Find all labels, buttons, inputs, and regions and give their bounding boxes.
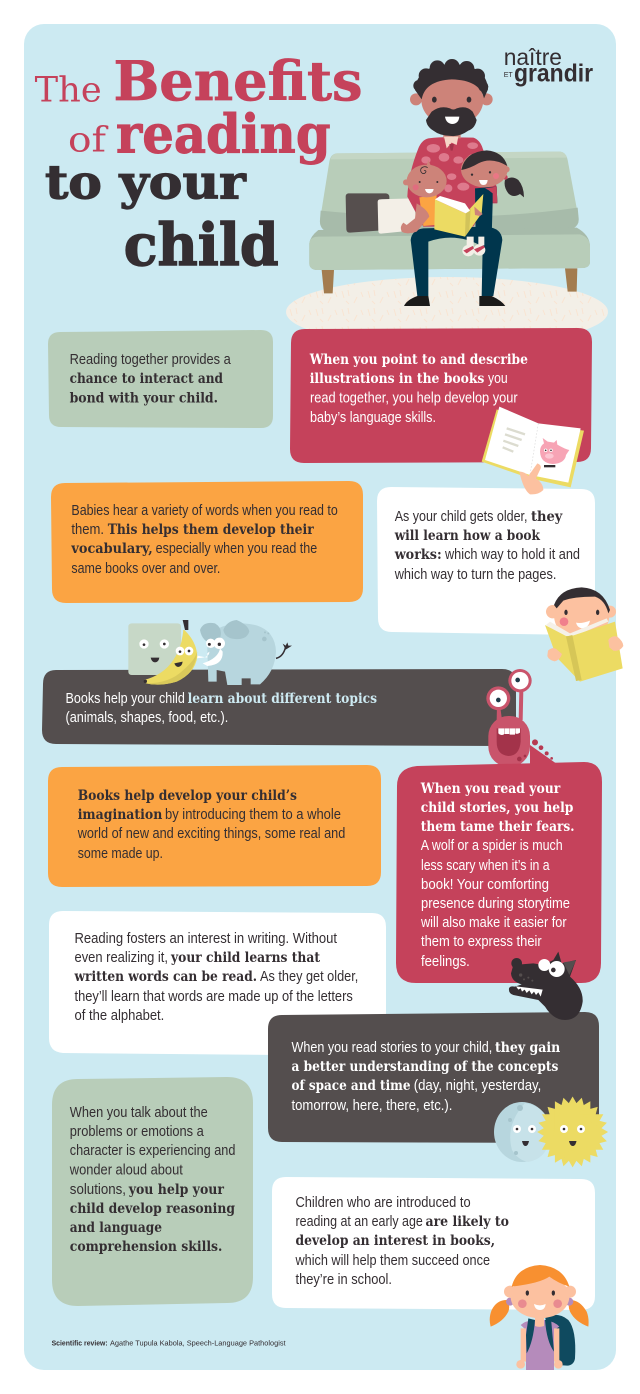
card: imagination: some made up.: [78, 846, 163, 862]
card: interest in writing: even realizing it,: [74, 950, 168, 966]
card: reasoning and comprehension: solutions,: [70, 1182, 126, 1198]
card: reasoning and comprehension: [52, 1077, 253, 1306]
card: bonding: [48, 330, 273, 428]
card: illustrations: illustrations in the books: [310, 371, 485, 387]
card: vocabulary: especially when you read the: [156, 541, 317, 557]
card: reasoning and comprehension: comprehension skills.: [70, 1239, 222, 1255]
card: interest in writing: written words can be read.: [74, 969, 257, 985]
icon: square, banana and elephant characters: [128, 620, 292, 685]
card: reasoning and comprehension: you help your: [128, 1182, 225, 1198]
icon: girl with backpack: [490, 1265, 589, 1370]
title: [35, 49, 362, 279]
title: Benefits: [114, 49, 362, 113]
card: tame fears: will also make it easier for: [420, 915, 567, 931]
card: imagination: world of new and exciting things, some real and: [77, 826, 345, 842]
card: how a book works: which way to turn the pages.: [394, 567, 556, 583]
card: interest in writing: [49, 911, 386, 1056]
card: different topics: [42, 669, 516, 746]
card: tame fears: [396, 762, 602, 983]
card: interest in books: which will help them succeed once: [295, 1253, 490, 1269]
card: reasoning and comprehension: When you talk about the: [70, 1105, 208, 1121]
card: tame fears: them tame their fears.: [421, 819, 574, 835]
card: interest in writing: they’ll learn that words are made up of the letters: [74, 989, 353, 1005]
card: bonding: chance to interact and: [70, 371, 223, 387]
icon: smiling square: [128, 623, 181, 675]
card: imagination: imagination: [78, 807, 162, 823]
card: how a book works: they: [531, 509, 563, 525]
rug: [286, 277, 608, 347]
card: vocabulary: same books over and over.: [71, 561, 220, 577]
card: vocabulary: vocabulary,: [70, 541, 153, 557]
sofa: [309, 152, 590, 293]
open book: [434, 194, 483, 237]
card: space and time: of space and time: [292, 1078, 411, 1094]
card: how a book works: As your child gets older,: [395, 509, 528, 525]
card: illustrations: you: [488, 371, 508, 387]
card: tame fears: presence during storytime: [421, 896, 570, 912]
card: how a book works: works:: [394, 547, 442, 563]
card: interest in books: they’re in school.: [296, 1272, 392, 1288]
card: tame fears: child stories, you help: [421, 800, 573, 816]
icon: wolf: [509, 952, 583, 1020]
card: imagination: by introducing them to a whole: [165, 807, 341, 823]
girl: [461, 150, 524, 256]
illustration: father reading on sofa: [286, 59, 608, 347]
card: illustrations: [290, 328, 592, 463]
card: different topics: (animals, shapes, food, etc.).: [66, 710, 228, 726]
icon: red monster: [486, 669, 558, 767]
card: interest in books: [272, 1177, 595, 1310]
card: space and time: (day, night, yesterday,: [414, 1078, 541, 1094]
card: reasoning and comprehension: and language: [70, 1220, 162, 1236]
scientific review credit: Agathe Tupula Kabola, Speech-Language Pathologist: [110, 1338, 286, 1348]
card: tame fears: them to express their: [421, 934, 542, 950]
card: interest in writing: your child learns that: [170, 950, 321, 966]
icon: boy reading a book: [545, 587, 623, 682]
scientific review credit: Scientific review:: [52, 1338, 108, 1348]
card: imagination: [48, 765, 381, 887]
elephant: [194, 620, 292, 685]
card: interest in books: reading at an early age: [296, 1214, 423, 1230]
card: space and time: tomorrow, here, there, etc.).: [292, 1098, 452, 1114]
card: vocabulary: them.: [71, 522, 104, 538]
card: tame fears: book! Your comforting: [421, 877, 549, 893]
card: how a book works: [377, 487, 595, 635]
title: to your: [45, 155, 247, 210]
card: interest in books: develop an interest in books,: [296, 1233, 495, 1249]
card: interest in writing: of the alphabet.: [74, 1008, 164, 1024]
card: interest in books: Children who are introduced to: [296, 1195, 471, 1211]
card: interest in writing: As they get older,: [260, 969, 358, 985]
icon: open book with pig and pointing hand: [482, 407, 584, 494]
card: vocabulary: Babies hear a variety of words when you read to: [71, 503, 338, 519]
baby: [401, 160, 447, 233]
card: bonding: bond with your child.: [70, 390, 218, 406]
logo: naitre et grandir: ET: [504, 70, 513, 79]
logo: naitre et grandir: grandir: [514, 60, 593, 88]
father, children and sofa artwork: [309, 59, 590, 306]
card: space and time: a better understanding of the concepts: [292, 1059, 559, 1075]
card: reasoning and comprehension: character is experiencing and: [70, 1143, 235, 1159]
card: how a book works: which way to hold it and: [444, 547, 580, 563]
card: different topics: learn about different topics: [188, 691, 377, 707]
square body and face: [128, 639, 181, 675]
pillows: [346, 193, 417, 234]
logo: naitre et grandir: [504, 44, 593, 88]
icon: moon: [494, 1102, 550, 1162]
card: interest in books: are likely to: [426, 1214, 509, 1230]
card: reasoning and comprehension: problems or emotions a: [70, 1124, 204, 1140]
card: vocabulary: This helps them develop their: [108, 522, 314, 538]
card: tame fears: less scary when it’s in a: [421, 858, 550, 874]
card: vocabulary: [51, 481, 363, 603]
card: illustrations: When you point to and describe: [309, 352, 528, 368]
card: how a book works: will learn how a book: [394, 528, 541, 544]
title: The: [35, 71, 102, 111]
card: bonding: Reading together provides a: [70, 352, 231, 368]
card: different topics: Books help your child: [66, 691, 185, 707]
card: tame fears: When you read your: [420, 781, 561, 797]
card: reasoning and comprehension: child develop reasoning: [70, 1201, 235, 1217]
father: [404, 59, 505, 306]
logo: naitre et grandir: naître: [504, 44, 562, 70]
title: reading: [116, 104, 331, 166]
title: child: [124, 211, 279, 279]
card: interest in writing: Reading fosters an interest in writing. Without: [74, 931, 337, 947]
card: reasoning and comprehension: wonder aloud about: [69, 1162, 183, 1178]
title: of: [68, 121, 109, 161]
card: space and time: When you read stories to your child,: [292, 1040, 492, 1056]
card: tame fears: feelings.: [421, 954, 470, 970]
card: space and time: [268, 1012, 599, 1143]
card: tame fears: A wolf or a spider is much: [421, 838, 563, 854]
card: imagination: Books help develop your child’s: [78, 788, 297, 804]
card: space and time: they gain: [495, 1040, 560, 1056]
icon: sun: [537, 1085, 619, 1171]
banana: [144, 620, 197, 685]
card: illustrations: baby’s language skills.: [310, 410, 436, 426]
card: illustrations: read together, you help develop your: [310, 390, 518, 406]
